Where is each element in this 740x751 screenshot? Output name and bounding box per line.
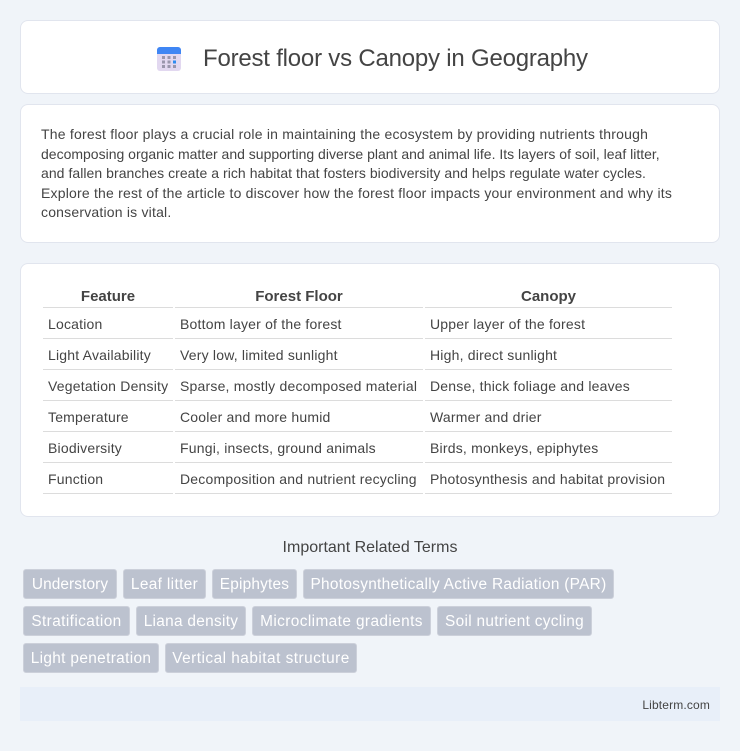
row: function <box>48 471 665 487</box>
footer bar <box>20 687 720 721</box>
column headers <box>81 288 576 305</box>
tag: soil nutrient cycling <box>437 606 592 636</box>
row: temperature: Warmer and drier <box>430 409 542 425</box>
row: location: Upper layer of the forest <box>430 316 585 332</box>
tag: stratification: Stratification <box>31 613 122 630</box>
row: vegetation density: Dense, thick foliage and leaves <box>430 378 630 394</box>
row: biodiversity: Birds, monkeys, epiphytes <box>430 440 598 456</box>
tag: light penetration: Light penetration <box>31 650 151 667</box>
intro text: and fallen branches create a rich habitat that fosters biodiversity and helps regulate water cycles. <box>41 165 646 181</box>
column headers: Forest Floor <box>255 288 343 305</box>
tag: epiphytes: Epiphytes <box>220 576 289 593</box>
tag: leaf litter <box>123 569 206 599</box>
header panel <box>20 20 720 94</box>
tag: understory <box>23 569 117 599</box>
row: biodiversity: Biodiversity <box>48 440 122 456</box>
comparison table panel <box>20 263 720 517</box>
tag: stratification <box>23 606 130 636</box>
tag: understory: Understory <box>32 576 108 593</box>
intro text: The forest floor plays a crucial role in maintaining the ecosystem by providing nutrients through <box>41 126 648 142</box>
tag: vertical habitat structure <box>165 643 357 673</box>
title: Forest floor vs Canopy in Geography <box>203 45 588 72</box>
footer credit: Libterm.com <box>642 698 710 712</box>
row: function: Decomposition and nutrient recycling <box>180 471 417 487</box>
intro text <box>41 126 672 220</box>
column headers: Canopy <box>521 288 576 305</box>
row: location: Location <box>48 316 103 332</box>
row: temperature: Cooler and more humid <box>180 409 330 425</box>
row: location <box>48 316 585 332</box>
tag: microclimate gradients <box>252 606 431 636</box>
icon: calendar grid <box>157 47 181 71</box>
intro text: conservation is vital. <box>41 204 171 220</box>
tag: PAR: Photosynthetically Active Radiation (PAR) <box>310 576 607 593</box>
tag: soil nutrient cycling: Soil nutrient cycling <box>445 613 584 630</box>
heading: related terms: Important Related Terms <box>283 539 457 556</box>
row: vegetation density: Vegetation Density <box>48 378 168 394</box>
row: biodiversity <box>48 440 598 456</box>
row: temperature <box>48 409 542 425</box>
tag: microclimate gradients: Microclimate gradients <box>260 613 423 630</box>
intro text: Explore the rest of the article to discover how the forest floor impacts your environment and why its <box>41 185 672 201</box>
tag: vertical habitat structure: Vertical habitat structure <box>172 650 350 667</box>
row: light availability: Very low, limited sunlight <box>180 347 338 363</box>
row: function: Photosynthesis and habitat provision <box>430 471 665 487</box>
row: vegetation density: Sparse, mostly decomposed material <box>180 378 417 394</box>
tag: leaf litter: Leaf litter <box>131 576 198 593</box>
row: light availability: Light Availability <box>48 347 151 363</box>
tag group <box>23 569 614 673</box>
row: function: Function <box>48 471 103 487</box>
row: vegetation density <box>48 378 630 394</box>
tag: PAR <box>303 569 614 599</box>
intro text: decomposing organic matter and supporting diverse plant and animal life. Its layers of soil, leaf litter, <box>41 146 660 162</box>
tag: light penetration <box>23 643 159 673</box>
tag: liana density <box>136 606 246 636</box>
row: biodiversity: Fungi, insects, ground animals <box>180 440 376 456</box>
row: location: Bottom layer of the forest <box>180 316 342 332</box>
intro panel <box>20 104 720 243</box>
tag: epiphytes <box>212 569 297 599</box>
column headers: Feature <box>81 288 135 305</box>
row: light availability <box>48 347 557 363</box>
tag: liana density: Liana density <box>144 613 238 630</box>
row: temperature: Temperature <box>48 409 129 425</box>
row: light availability: High, direct sunlight <box>430 347 557 363</box>
